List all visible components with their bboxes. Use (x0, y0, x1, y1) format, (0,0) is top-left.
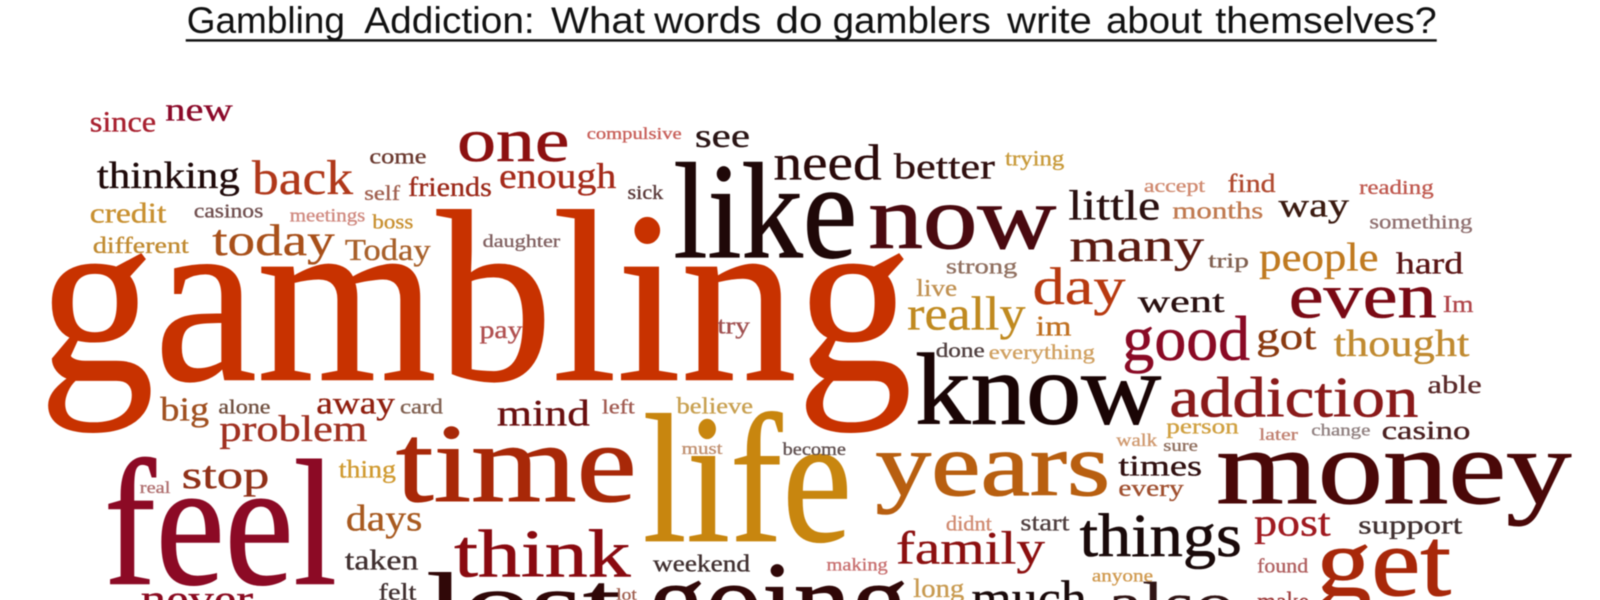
smaller words: making (827, 554, 888, 574)
smaller words: didnt (946, 512, 992, 536)
word: even: even (1289, 261, 1437, 331)
smaller words: problem (219, 408, 367, 449)
word: good: good (1122, 304, 1250, 374)
word: money: money (1216, 408, 1571, 526)
smaller words: self (364, 181, 401, 205)
smaller words: find (1228, 168, 1276, 198)
smaller words: better (894, 147, 995, 187)
smaller words: everything (989, 340, 1095, 364)
smaller words: different (93, 233, 189, 259)
word: think: think (454, 517, 631, 592)
smaller words: change (1311, 421, 1371, 440)
smaller words: Im (1443, 291, 1473, 318)
smaller words: boss (372, 212, 413, 234)
smaller words: casino (1382, 415, 1470, 445)
smaller words: meetings (290, 205, 365, 226)
smaller words: back (252, 150, 354, 205)
smaller words: Today (345, 233, 431, 267)
smaller words: later (1259, 425, 1298, 444)
smaller words: able (1428, 370, 1482, 399)
title: What (551, 0, 645, 41)
smaller words: alone (218, 396, 270, 418)
smaller words: thought (1334, 323, 1470, 365)
smaller words: months (1172, 197, 1263, 224)
smaller words: enough (499, 156, 616, 196)
smaller words: today (212, 215, 335, 265)
smaller words: person (1166, 414, 1239, 439)
smaller words: times (1118, 451, 1202, 483)
word: time: time (396, 402, 637, 526)
title: about (1106, 0, 1202, 41)
smaller words: since (90, 107, 156, 139)
word: life: life (643, 377, 852, 581)
smaller words: day (1033, 258, 1126, 316)
smaller words: hard (1396, 246, 1463, 280)
smaller words: pay (480, 315, 523, 344)
smaller words: live (916, 275, 957, 302)
smaller words: strong (946, 253, 1017, 278)
smaller words: start (1020, 510, 1070, 537)
word: addiction: addiction (1169, 366, 1418, 429)
smaller words: thing (339, 455, 396, 484)
smaller words: every (1118, 475, 1185, 502)
smaller words: weekend (653, 550, 750, 577)
word: now: now (868, 169, 1056, 268)
smaller words: sure (1163, 436, 1198, 455)
smaller words: way (1279, 187, 1349, 224)
smaller words: compulsive (587, 124, 682, 143)
smaller words: support (1358, 510, 1463, 540)
title (186, 0, 1437, 42)
smaller words: away (316, 385, 395, 420)
smaller words: see (695, 118, 750, 155)
smaller words: big (160, 391, 209, 428)
smaller words: accept (1144, 176, 1206, 197)
smaller words: got (1256, 316, 1317, 358)
smaller words: little (1068, 183, 1160, 229)
smaller words: believe (677, 393, 753, 419)
word: one: one (457, 107, 569, 175)
smaller words: trying (1005, 145, 1064, 170)
smaller words: done (936, 340, 985, 362)
smaller words: real (140, 478, 171, 497)
title: themselves? (1215, 0, 1437, 41)
title: write (1006, 0, 1092, 41)
smaller words: found (1257, 555, 1308, 577)
smaller words: went (1138, 284, 1225, 319)
smaller words: people (1259, 235, 1379, 279)
smaller words: sick (628, 182, 664, 204)
smaller words: try (717, 313, 751, 340)
title: words (653, 0, 761, 41)
smaller words: walk (1116, 430, 1158, 450)
title: do (776, 0, 822, 41)
smaller words: trip (1208, 248, 1249, 272)
word: like: like (673, 135, 857, 287)
title: Gambling (187, 0, 345, 41)
smaller words: mind (497, 393, 590, 434)
smaller words: post (1254, 502, 1331, 545)
smaller words: many (1069, 220, 1205, 272)
smaller words: friends (408, 171, 492, 202)
smaller words: reading (1359, 177, 1434, 199)
smaller words: need (773, 136, 882, 192)
word: gambling: gambling (39, 162, 912, 433)
smaller words: new (165, 92, 233, 128)
smaller words: taken (345, 545, 418, 576)
smaller words: anyone (1092, 566, 1153, 586)
smaller words: must (682, 439, 723, 458)
smaller words (90, 92, 1482, 600)
smaller words: casinos (194, 200, 263, 222)
word: years: years (876, 416, 1110, 515)
smaller words: really (907, 288, 1026, 341)
smaller words: thinking (97, 155, 240, 197)
smaller words: come (369, 143, 427, 168)
smaller words: become (783, 439, 846, 459)
smaller words: left (602, 396, 635, 418)
word: know: know (915, 333, 1162, 446)
smaller words: credit (90, 198, 166, 229)
smaller words: something (1369, 212, 1472, 234)
smaller words: card (400, 394, 443, 418)
title: Addiction: (364, 0, 535, 41)
smaller words: im (1036, 312, 1071, 343)
smaller words: family (896, 522, 1046, 574)
title: gamblers (833, 0, 991, 41)
smaller words: stop (182, 454, 269, 497)
smaller words: daughter (483, 231, 560, 251)
word: things: things (1080, 502, 1242, 570)
smaller words: days (346, 498, 422, 539)
